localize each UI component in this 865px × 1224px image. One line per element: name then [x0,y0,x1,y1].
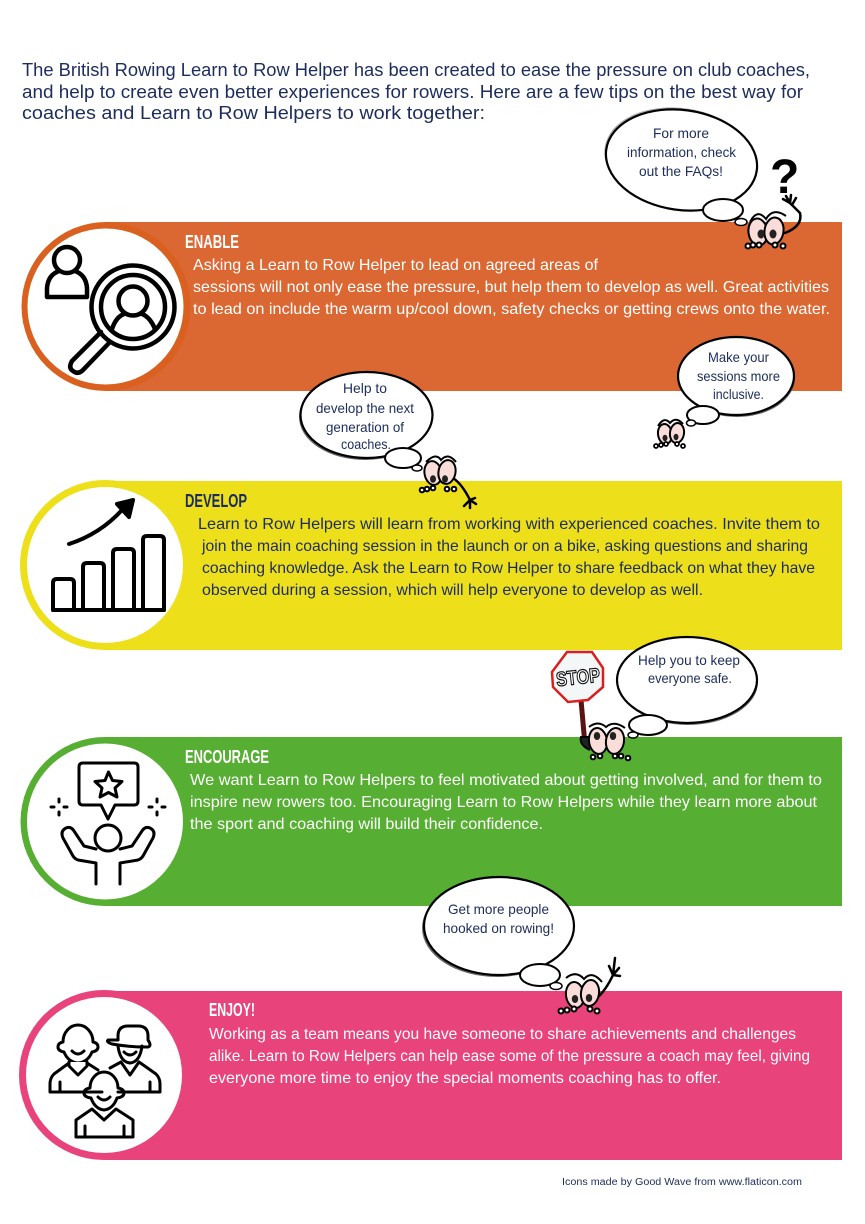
heading: enable: ENABLE [185,232,239,252]
intro text: The British Rowing Learn to Row Helper has been created to ease the pressure on club coaches, [22,60,810,80]
character: waving [558,958,620,1014]
callout: next generation thought bubble: generation of [326,419,404,435]
text: develop: coaching knowledge. Ask the Learn to Row Helper to share feedback on what they have [202,560,815,577]
text: enable: to lead on include the warm up/cool down, safety checks or getting crews onto the water. [193,301,830,318]
callout: inclusive thought bubble: inclusive. [713,386,764,402]
panel: encourage [20,737,842,906]
text: develop: Learn to Row Helpers will learn from working with experienced coaches. Invite them to [198,516,820,533]
callout: FAQs thought bubble: out the FAQs! [639,163,723,179]
character: puzzled with question mark: ? [770,151,799,204]
text: enjoy [209,1026,810,1087]
callout: next generation thought bubble: develop the next [316,400,414,416]
intro text: coaches and Learn to Row Helpers to work together: [22,103,485,123]
character: holding stop sign: STOP [555,665,601,691]
callout: next generation thought bubble [299,372,432,471]
text: enjoy: Working as a team means you have someone to share achievements and challenges [209,1026,796,1043]
character: pointing down [420,456,476,508]
character: peeking [654,420,685,448]
callout: hooked on rowing thought bubble [422,877,574,990]
intro text [22,60,810,123]
character: puzzled with question mark [746,151,800,248]
icon: person and magnifying glass [47,247,174,373]
icon: person celebrating under star [51,763,165,884]
callout: next generation thought bubble: coaches. [341,436,391,452]
callout: keep safe thought bubble [617,637,758,738]
text: encourage: inspire new rowers too. Encouraging Learn to Row Helpers while they learn more about [190,794,818,811]
text: develop: observed during a session, which will help everyone to develop as well. [202,582,703,599]
attribution: Icons made by Good Wave from www.flaticon.com [562,1177,802,1188]
heading: enjoy: ENJOY! [209,1000,255,1020]
callout: hooked on rowing thought bubble: hooked on rowing! [443,920,554,936]
icon: rising bar chart [53,500,164,610]
callout: hooked on rowing thought bubble: Get more people [448,901,549,917]
callout: keep safe thought bubble: everyone safe. [648,670,732,686]
panel: enable [22,222,842,391]
heading: encourage: ENCOURAGE [185,747,269,767]
callout: inclusive thought bubble [678,337,795,426]
callout: inclusive thought bubble: sessions more [697,368,780,384]
panel: enjoy [19,990,842,1160]
character: holding stop sign [552,652,630,760]
callout: keep safe thought bubble: Help you to keep [638,652,740,668]
callout: FAQs thought bubble: For more [653,125,709,141]
text: enable: Asking a Learn to Row Helper to lead on agreed areas of [193,257,599,274]
text: develop [198,516,820,599]
callout: next generation thought bubble: Help to [343,380,387,396]
intro text: and help to create even better experiences for rowers. Here are a few tips on the best way for [22,82,803,102]
callout: inclusive thought bubble: Make your [708,349,769,365]
text: encourage: We want Learn to Row Helpers to feel motivated about getting involved, and for them to [190,772,822,789]
panel: develop [20,480,842,650]
text: encourage: the sport and coaching will build their confidence. [190,816,543,833]
text: enjoy: alike. Learn to Row Helpers can help ease some of the pressure a coach may feel, giving [209,1048,810,1065]
icon: three people [50,1025,160,1137]
callout: FAQs thought bubble: information, check [627,144,737,160]
text: encourage [190,772,822,833]
text: enable: sessions will not only ease the pressure, but help them to develop as well. Great activities [193,279,829,296]
heading: develop: DEVELOP [185,491,247,511]
text: enable [193,257,830,318]
text: develop: join the main coaching session in the launch or on a bike, asking questions and sharing [201,538,808,555]
text: enjoy: everyone more time to enjoy the special moments coaching has to offer. [209,1070,721,1087]
callout: FAQs thought bubble [598,98,764,226]
